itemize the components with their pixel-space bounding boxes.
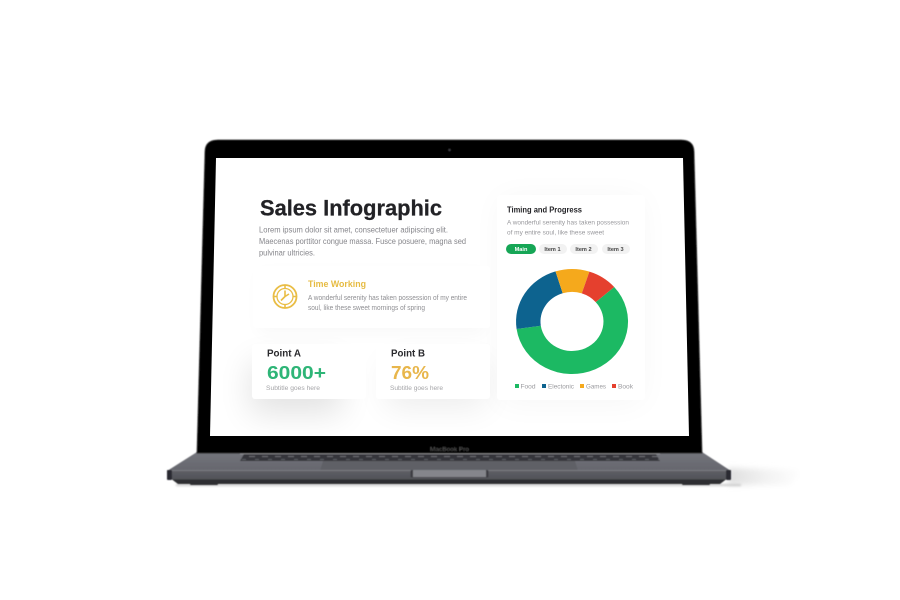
camera bbox=[448, 149, 451, 151]
laptop base bbox=[167, 452, 731, 485]
slide foreground bbox=[252, 195, 645, 400]
heading: Timing and Progress bbox=[507, 206, 583, 214]
intro paragraph: pulvinar ultricies. bbox=[259, 248, 315, 258]
label: Point A bbox=[267, 349, 301, 360]
screen bbox=[210, 158, 689, 436]
value: 6000+ bbox=[267, 362, 326, 383]
label: Point B bbox=[391, 349, 425, 360]
panel: timing and progress bbox=[506, 206, 633, 388]
card shadows bbox=[244, 365, 479, 422]
tabs bbox=[506, 244, 630, 254]
description bbox=[507, 220, 629, 236]
laptop shadow bbox=[176, 468, 803, 486]
slide content bbox=[250, 195, 645, 414]
description bbox=[308, 295, 467, 312]
tabs: Item 1 bbox=[544, 247, 561, 253]
panel: time working bbox=[272, 280, 467, 312]
tabs: Item 2 bbox=[575, 247, 592, 253]
legend: Food bbox=[520, 384, 536, 390]
underside bbox=[172, 480, 726, 484]
panel: point A bbox=[252, 349, 348, 399]
value: 76% bbox=[391, 362, 429, 383]
intro paragraph: Maecenas porttitor congue massa. Fusce posuere, magna sed bbox=[259, 236, 466, 246]
laptop lid bbox=[197, 140, 702, 453]
legend: Electonic bbox=[548, 384, 574, 390]
description: of my entire soul, like these sweet bbox=[507, 230, 604, 236]
intro paragraph bbox=[259, 224, 466, 258]
description: A wonderful serenity has taken possession of my entire bbox=[308, 295, 467, 302]
title: Sales Infographic bbox=[260, 196, 442, 220]
description: A wonderful serenity has taken possession bbox=[507, 220, 629, 226]
infographic canvas bbox=[166, 138, 779, 488]
legend bbox=[515, 384, 633, 388]
keyboard bbox=[240, 454, 660, 461]
model label: MacBook Pro bbox=[430, 447, 469, 453]
intro paragraph: Lorem ipsum dolor sit amet, consectetuer adipiscing elit. bbox=[259, 224, 448, 234]
donut chart bbox=[516, 269, 628, 374]
legend: Games bbox=[586, 384, 606, 390]
description: soul, like these sweet mornings of spring bbox=[308, 305, 425, 312]
front edge bbox=[167, 471, 731, 480]
subtitle: Subtitle goes here bbox=[390, 385, 444, 392]
trackpad bbox=[320, 461, 578, 471]
icon: clock bbox=[274, 285, 296, 308]
tabs: Item 3 bbox=[607, 247, 624, 253]
legend: Book bbox=[618, 384, 634, 390]
panel: point B bbox=[388, 349, 489, 399]
thumb notch bbox=[410, 470, 488, 478]
tabs: Main bbox=[515, 247, 528, 253]
heading: Time Working bbox=[308, 279, 366, 290]
subtitle: Subtitle goes here bbox=[266, 385, 321, 392]
